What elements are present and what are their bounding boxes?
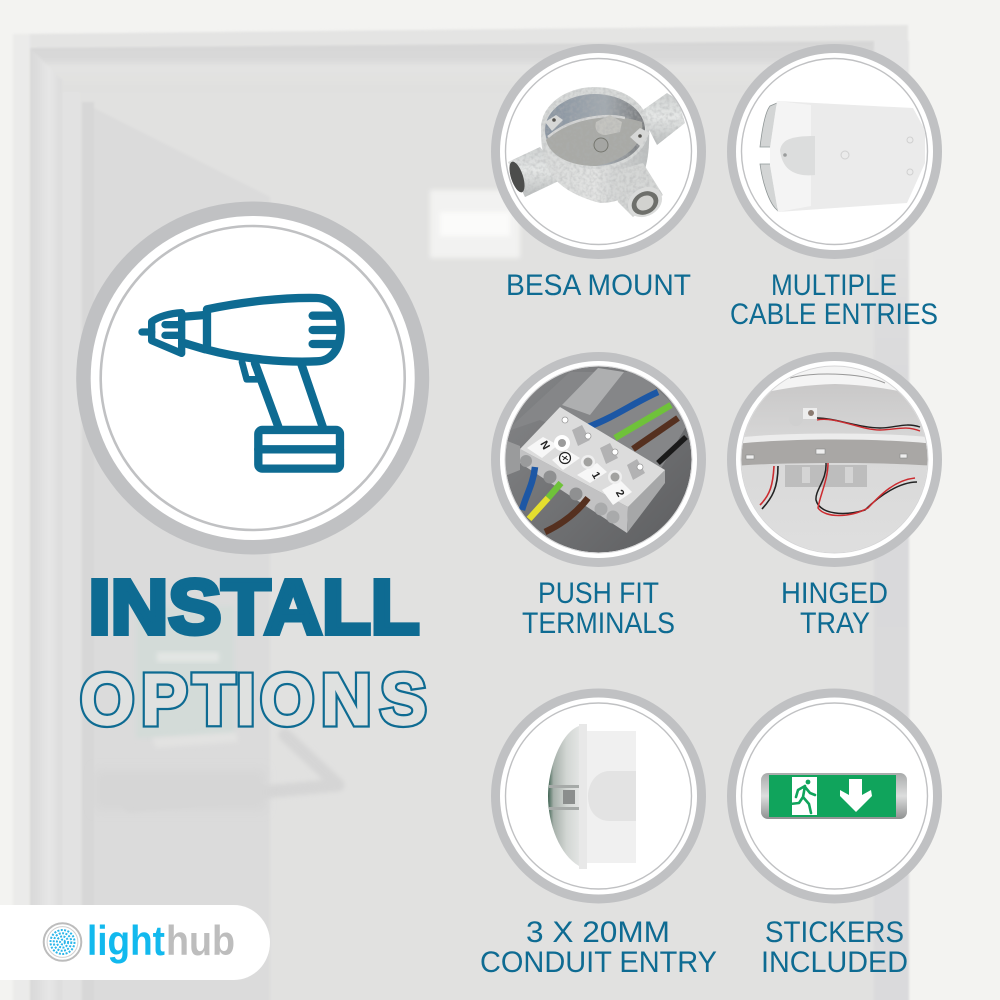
panel: besa mount xyxy=(491,44,706,302)
label: 3 X 20MM xyxy=(526,916,670,949)
photo: wired terminal block: N xyxy=(537,439,552,452)
title xyxy=(80,564,427,741)
label xyxy=(730,269,938,331)
photo: luminaire side view xyxy=(548,724,636,869)
label: MULTIPLE xyxy=(771,269,897,302)
label: CONDUIT ENTRY xyxy=(480,946,717,979)
label: STICKERS xyxy=(765,916,904,949)
wordmark: hub: hub xyxy=(166,917,235,964)
photo: galvanised besa box xyxy=(506,87,685,223)
photo: wired terminal block: 1 xyxy=(589,470,602,481)
photo: exit sign with green sticker xyxy=(761,773,907,819)
label: INCLUDED xyxy=(761,946,908,979)
heading: INSTALL: INSTALL xyxy=(88,564,420,650)
label xyxy=(480,916,717,979)
label xyxy=(761,916,908,979)
panel: stickers included xyxy=(727,688,942,979)
icon: running man xyxy=(790,780,815,813)
label: HINGED xyxy=(781,577,888,610)
label: BESA MOUNT xyxy=(506,269,691,302)
icon: down arrow xyxy=(840,779,872,812)
label xyxy=(781,577,888,640)
photo: luminaire rear base xyxy=(760,101,925,212)
panel: hinged tray xyxy=(727,352,942,640)
icon: logo rings and dots xyxy=(44,923,81,961)
label: PUSH FIT xyxy=(538,577,659,610)
panel: multiple cable entries xyxy=(727,44,942,331)
wordmark: light: light xyxy=(87,917,165,964)
photo: wired terminal block: 2 xyxy=(613,488,626,499)
heading: OPTIONS outline: OPTIONS xyxy=(80,659,427,741)
label: TRAY xyxy=(800,607,870,640)
label: CABLE ENTRIES xyxy=(730,298,938,331)
photo: open hinged tray with wiring xyxy=(742,366,928,552)
label xyxy=(522,577,675,640)
panel: push fit terminals xyxy=(491,352,706,640)
panel: conduit entry xyxy=(480,688,717,979)
main drill badge xyxy=(76,202,429,554)
background: faded exit box and push bar xyxy=(95,606,338,810)
logo: lighthub xyxy=(0,905,270,980)
photo: wired terminal block xyxy=(506,366,692,552)
label: TERMINALS xyxy=(522,607,675,640)
icon: cordless drill xyxy=(142,298,341,469)
heading: OPTIONS outline: OPTIONS xyxy=(80,659,427,741)
